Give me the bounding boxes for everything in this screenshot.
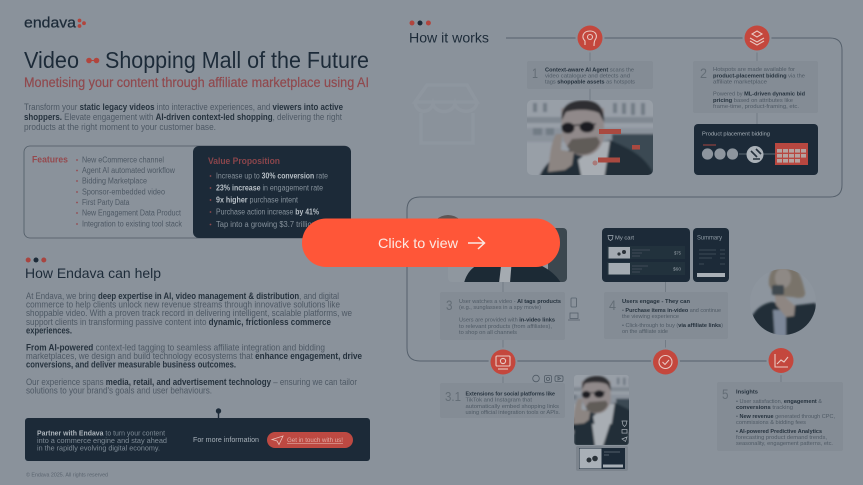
step 5 card: seasonality, engagement patterns, etc. — [736, 441, 833, 447]
step 2 card: Hotspots are made available for — [713, 67, 795, 73]
icons: social platforms — [533, 375, 563, 382]
step 1 card: video catalogue and detects and — [545, 74, 630, 80]
text block: how Endava can help: support clients in transforming passive content into dynamic, frictionless commerce — [26, 316, 331, 327]
photo: woman with phone — [752, 269, 816, 335]
step 5 card: commissions & bidding fees — [736, 420, 806, 426]
step 1 photo with hotspots — [527, 100, 653, 175]
vertical social video photo — [574, 375, 629, 445]
step 4 card: Users engage - They can — [622, 299, 690, 305]
step 2 icon — [742, 24, 772, 52]
step 2 card — [693, 61, 818, 113]
heading: how Endava can help: How Endava can help — [25, 265, 161, 281]
step 2 card: pricing based on attributes like — [713, 98, 794, 104]
features list: Sponsor-embedded video — [82, 188, 165, 197]
features list: Agent AI automated workflow — [82, 166, 175, 175]
step 4 card — [604, 292, 728, 339]
product thumbnail panel — [576, 446, 628, 471]
footer: © Endava 2025. All rights reserved — [26, 472, 108, 479]
text block: how Endava can help: solutions to your brand's goals and user behaviours. — [26, 384, 212, 395]
step 3.1 card: using official integration tools or APIs. — [466, 410, 560, 416]
contact button: Get in touch with us! — [287, 437, 343, 444]
step 5 card: conversions tracking — [736, 405, 793, 411]
partner text: in the rapidly evolving digital economy. — [37, 444, 160, 452]
features list: First Party Data — [82, 198, 130, 207]
step 3 card: (e.g., sunglasses in a spy movie) — [459, 305, 541, 311]
endava logo: endava — [24, 14, 77, 32]
step 4 icon — [651, 348, 680, 376]
panel: cart: My cart — [615, 236, 634, 242]
value proposition panel: Value Proposition — [208, 156, 280, 166]
subtitle: Monetising your content through affiliate marketplace using AI — [24, 75, 369, 90]
panel: cart: $60 — [673, 266, 682, 272]
step 5 card: • AI-powered Predictive Analytics — [736, 429, 823, 435]
panel: summary — [693, 228, 729, 282]
features list: Bidding Marketplace — [82, 177, 147, 186]
step 3 card: to shop on all channels — [459, 330, 517, 336]
contact button — [267, 432, 353, 448]
features list: Integration to existing tool stack — [82, 220, 183, 229]
partner text: Partner with Endava to turn your content — [37, 429, 165, 437]
step 2 card: affiliate marketplace — [713, 79, 768, 85]
partner text — [37, 429, 167, 452]
step 1 icon — [576, 24, 604, 52]
click to view button — [302, 218, 560, 267]
step 2 card: Powered by ML-driven dynamic bid — [713, 92, 805, 98]
features list: Features — [32, 154, 68, 164]
step 4 card: • Purchase items in-video and continue — [622, 308, 722, 314]
value proposition panel: Tap into a growing $3.7 trillion market — [216, 220, 342, 229]
step 3 card: to relevant products (from affiliates), — [459, 324, 552, 330]
panel: cart — [602, 228, 690, 282]
step 3.1 card — [440, 383, 565, 418]
step 5 card: forecasting product demand trends, — [736, 435, 827, 441]
step 4 card: the viewing experience — [622, 314, 680, 320]
step 1 card — [527, 61, 653, 89]
title: Video — [24, 47, 79, 73]
features list: New Engagement Data Product — [82, 209, 182, 218]
value proposition panel — [193, 146, 351, 238]
step 5 card — [717, 382, 843, 451]
step 3 card: Users are provided with in-video links — [459, 318, 556, 324]
text block: how Endava can help: Our experience spans media, retail, and advertisement technology – ensuring we can tailor — [26, 376, 357, 387]
step 5 card: 5 — [722, 386, 729, 402]
social action icons — [622, 421, 627, 442]
text block: how Endava can help: At Endava, we bring deep expertise in AI, video management & distribution, and digital — [26, 290, 339, 301]
panel: product placement bidding — [694, 124, 818, 175]
step 3.1 card: automatically embed shopping links — [466, 404, 559, 410]
intro text: Transform your static legacy videos into interactive experiences, and viewers into active — [24, 102, 343, 112]
section dots — [410, 20, 431, 26]
text block: how Endava can help: conversions, and deliver measurable business outcomes. — [26, 359, 236, 370]
hotspot tags — [592, 129, 640, 166]
more information label: For more information — [193, 437, 259, 444]
step 1 card: 1 — [532, 65, 538, 81]
step 3 card: 3 — [446, 297, 453, 313]
panel: features and value proposition — [24, 146, 351, 238]
icon: faint store — [415, 85, 477, 143]
call to action panel — [25, 408, 370, 461]
step 3.1 card: Extensions for social platforms like — [466, 392, 556, 398]
partner text: into a commerce engine and stay ahead — [37, 437, 167, 445]
step 4 card: 4 — [609, 297, 616, 313]
step 4 card: on the affiliate side — [622, 329, 669, 335]
step 3 card: User watches a video - AI tags products — [459, 299, 562, 305]
step 5 card: Insights — [736, 390, 759, 396]
section dots — [26, 258, 46, 262]
step 3 card — [440, 292, 565, 340]
value proposition panel: 23% increase in engagement rate — [216, 184, 323, 193]
step 2 card: frame-time, product-framing, etc. — [713, 104, 799, 110]
step 2 card: product-placement bidding via the — [713, 73, 806, 79]
step 5 icon — [766, 346, 796, 375]
step 3.1 icon — [488, 348, 518, 376]
step 2 card: 2 — [700, 65, 707, 81]
icons: phone and laptop — [568, 298, 580, 320]
step 4 card: • Click-through to buy (via affiliate links) — [622, 323, 723, 329]
heading: how it works: How it works — [409, 30, 489, 46]
text block: how Endava can help: shoppable video. With a proven track record in delivering intelligent, scalable platforms, we — [26, 307, 352, 318]
text block: how Endava can help: marketplaces, we design and build technology ecosystems that enhance engagement, drive — [26, 350, 362, 361]
features list: New eCommerce channel — [82, 156, 164, 165]
step 1 card: Context-aware AI Agent scans the — [545, 68, 635, 74]
flow line — [407, 38, 842, 361]
connector lines — [503, 50, 781, 383]
intro text — [24, 102, 343, 132]
features list — [32, 154, 183, 229]
panel: cart: $75 — [674, 250, 682, 256]
text block: how Endava can help: experiences. — [26, 324, 72, 335]
text block: how Endava can help: From AI-powered context-led tagging to seamless affiliate integration and bidding — [26, 341, 325, 352]
panel: summary: Summary — [697, 236, 722, 242]
step 5 card: • User satisfaction, engagement & — [736, 399, 822, 405]
value proposition panel: Purchase action increase by 41% — [216, 208, 319, 217]
step 3.1 card: 3.1 — [445, 389, 461, 404]
text block: how Endava can help — [26, 290, 362, 395]
step 1 card: tags shoppable assets as hotspots — [545, 80, 635, 86]
intro text: shoppers. Elevate engagement with AI-driven context-led shopping, delivering the right — [24, 112, 342, 122]
text block: how Endava can help: commerce to help clients unlock new revenue streams through innovative solutions like — [26, 298, 340, 310]
step 3 photo — [431, 215, 567, 283]
title: Shopping Mall of the Future — [105, 47, 369, 73]
panel: product placement bidding: Product placement bidding — [702, 132, 770, 138]
step 3.1 card: TikTok and Instagram that — [466, 398, 532, 404]
intro text: products at the right moment to your customer base. — [24, 122, 216, 132]
value proposition panel: 9x higher purchase intent — [216, 196, 299, 205]
value proposition panel: Increase up to 30% conversion rate — [216, 172, 328, 181]
click to view button: Click to view — [378, 235, 459, 251]
icon: arrow — [468, 237, 484, 249]
step 5 card: • New revenue generated through CPC, — [736, 414, 835, 420]
